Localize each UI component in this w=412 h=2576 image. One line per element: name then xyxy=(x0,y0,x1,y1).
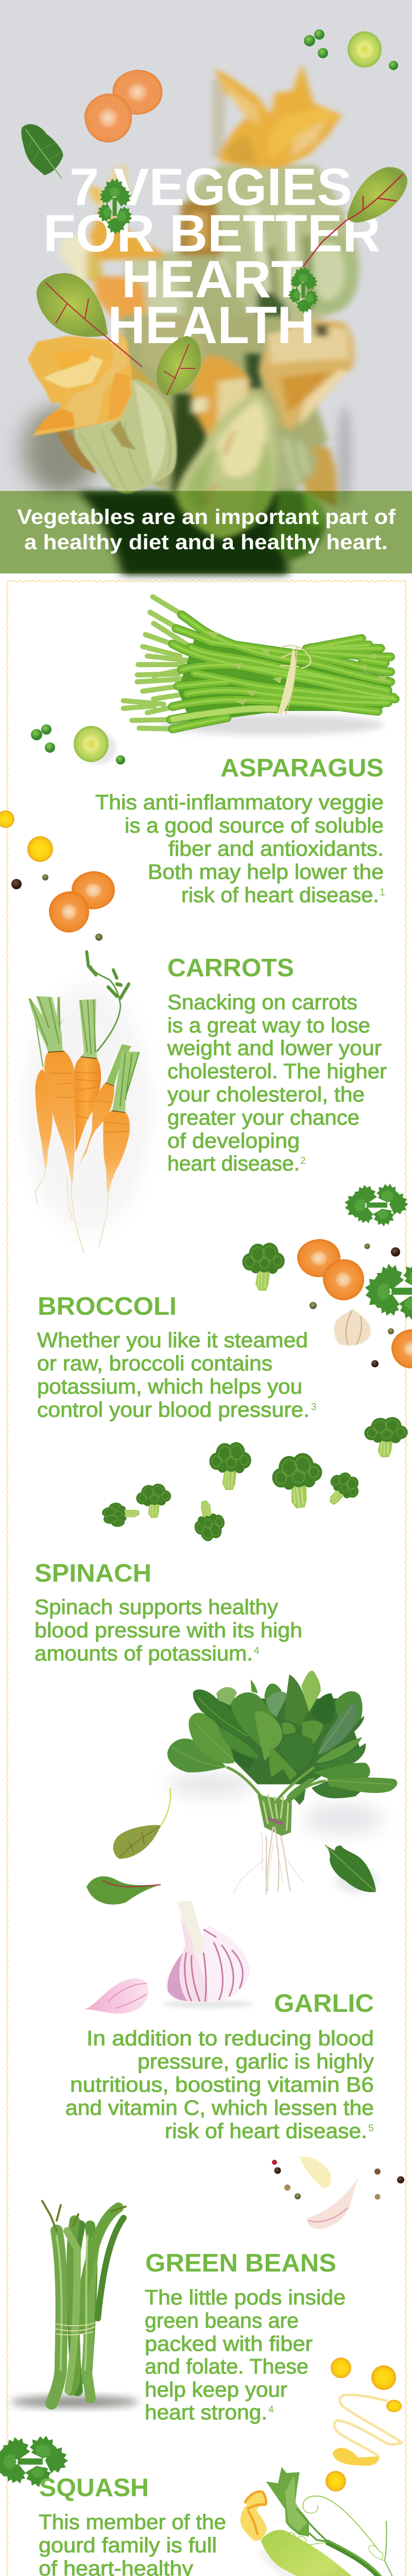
panel: wavy content frame xyxy=(6,580,407,2576)
title: 7 VEGGIES xyxy=(70,158,352,216)
text: carrots body: Snacking on carrots xyxy=(167,990,357,1014)
heading: asparagus: ASPARAGUS xyxy=(220,754,384,782)
text: broccoli body xyxy=(37,1328,317,1421)
text: squash body: This member of the xyxy=(39,2510,226,2534)
icon: parsley right xyxy=(364,1261,412,1323)
text: carrots body xyxy=(167,990,387,1175)
icon: hero spinach leaf xyxy=(21,124,63,179)
text: green beans body: and folate. These xyxy=(145,2354,308,2378)
icon: beet leaf xyxy=(113,1788,170,1859)
heading: carrots: CARROTS xyxy=(167,954,294,982)
icon: carrot slices xyxy=(49,871,115,933)
icon: spinach leaf xyxy=(325,1845,377,1893)
text: garlic body: nutritious, boosting vitamin B6 xyxy=(70,2073,374,2096)
text: asparagus body: risk of heart disease. xyxy=(181,883,379,907)
text: spinach body: 4 xyxy=(254,1646,260,1656)
heading: squash: SQUASH xyxy=(39,2474,149,2502)
in-focus left blossom and bud xyxy=(28,326,177,494)
icon: parsley left xyxy=(0,2434,69,2489)
icon: cream and pink cloves xyxy=(300,2157,358,2229)
text: asparagus body xyxy=(95,790,385,907)
text: green beans body: 4 xyxy=(268,2404,274,2415)
heading: broccoli: BROCCOLI xyxy=(38,1293,177,1320)
squash illustration xyxy=(241,2467,412,2576)
text: spinach body: Spinach supports healthy xyxy=(35,1595,279,1619)
section: green beans xyxy=(10,2201,402,2492)
text: green beans body xyxy=(145,2285,346,2424)
icon: broccoli floret xyxy=(242,1243,285,1291)
text: broccoli body: or raw, broccoli contains xyxy=(37,1351,272,1375)
text: garlic body: pressure, garlic is highly xyxy=(138,2049,374,2073)
intro text: a healthy diet and a healthy heart. xyxy=(24,530,388,554)
text: garlic body xyxy=(65,2026,374,2143)
text: asparagus body: Both may help lower the xyxy=(148,860,384,884)
text: garlic body: 5 xyxy=(368,2123,374,2134)
asparagus bunch xyxy=(124,597,395,735)
icon: hero peas and leek xyxy=(304,29,398,70)
text: asparagus body: This anti-inflammatory veggie xyxy=(95,790,384,814)
section: carrots xyxy=(24,952,387,1252)
section: broccoli xyxy=(37,1182,412,1544)
panel: intro band xyxy=(0,491,412,573)
icon: beet leaf left xyxy=(37,273,142,367)
icon: hero carrot slices xyxy=(84,70,163,142)
text: broccoli body: control your blood pressure. xyxy=(37,1398,310,1421)
spinach bunch xyxy=(167,1671,397,1894)
title xyxy=(43,158,381,354)
text: spinach body: blood pressure with its high xyxy=(35,1618,302,1642)
text: carrots body: is a great way to lose xyxy=(167,1013,370,1037)
carrots illustration xyxy=(24,952,151,1252)
green beans bundle xyxy=(10,2201,139,2408)
text: asparagus body: 1 xyxy=(380,887,385,898)
text: carrots body: of developing xyxy=(167,1129,300,1153)
icon: peppercorns xyxy=(11,874,102,941)
icon: red-veined leaf xyxy=(87,1876,161,1905)
text: asparagus body: is a good source of soluble xyxy=(125,814,384,837)
panel: hero xyxy=(0,0,412,575)
text: garlic body: and vitamin C, which lessen the xyxy=(65,2096,374,2120)
icon: beet leaf lower xyxy=(157,336,201,396)
icon: scattered peppercorns xyxy=(272,2160,404,2200)
text: broccoli body: 3 xyxy=(311,1402,317,1413)
section: garlic xyxy=(65,1901,404,2229)
text: spinach body xyxy=(35,1595,302,1665)
title: HEALTH xyxy=(108,296,315,354)
heading: green beans: GREEN BEANS xyxy=(145,2249,336,2277)
text: carrots body: your cholesterol, the xyxy=(167,1082,365,1106)
icon: peppercorns xyxy=(310,1244,400,1367)
intro text: Vegetables are an important part of xyxy=(17,505,396,529)
title: FOR BETTER xyxy=(43,204,381,263)
heading: garlic: GARLIC xyxy=(274,1990,374,2018)
text: green beans body: heart strong. xyxy=(145,2400,267,2424)
blurred squash blossoms, upper part xyxy=(60,63,359,330)
section: spinach xyxy=(35,1560,397,1905)
text: garlic body: In addition to reducing blood xyxy=(87,2026,374,2050)
title: HEART xyxy=(122,250,303,309)
text: broccoli body: Whether you like it steamed xyxy=(37,1328,308,1352)
garlic bulb xyxy=(162,1901,255,2008)
icon: carrot slices xyxy=(297,1239,412,1368)
text: carrots body: weight and lower your xyxy=(167,1036,382,1060)
icon: parsley top right xyxy=(344,1182,409,1228)
icon: beet leaf top right xyxy=(303,167,407,267)
icon: garlic clove xyxy=(334,1309,371,1346)
garlic clove xyxy=(84,1978,148,2013)
text: carrots body: cholesterol. The higher xyxy=(167,1059,387,1083)
text: green beans body: help keep your xyxy=(145,2378,287,2401)
text: green beans body: The little pods inside xyxy=(145,2285,346,2309)
text: broccoli body: potassium, which helps you xyxy=(37,1375,302,1398)
intro text xyxy=(17,505,396,554)
text: green beans body: packed with fiber xyxy=(145,2332,313,2355)
icon: honey drops and drizzle xyxy=(325,2358,402,2492)
text: carrots body: 2 xyxy=(300,1156,306,1166)
text: spinach body: amounts of potassium. xyxy=(35,1641,253,1665)
section: asparagus xyxy=(0,597,395,941)
text: asparagus body: fiber and antioxidants. xyxy=(168,837,384,860)
icon: honey drops xyxy=(0,810,53,862)
icon: peas and leek slice xyxy=(31,724,125,765)
text: carrots body: greater your chance xyxy=(167,1106,359,1129)
icon: scattered broccoli florets xyxy=(101,1417,408,1544)
section: squash xyxy=(0,2434,412,2576)
text: squash body: gourd family is full xyxy=(39,2533,217,2557)
text: garlic body: risk of heart disease. xyxy=(165,2119,367,2143)
text: green beans body: green beans are xyxy=(145,2309,299,2332)
text: squash body xyxy=(39,2510,265,2576)
blurred squash blossoms, lower part xyxy=(23,316,354,575)
text: carrots body: heart disease. xyxy=(167,1151,300,1175)
icon: hero parsley sprigs xyxy=(96,177,319,314)
heading: spinach: SPINACH xyxy=(35,1560,151,1587)
